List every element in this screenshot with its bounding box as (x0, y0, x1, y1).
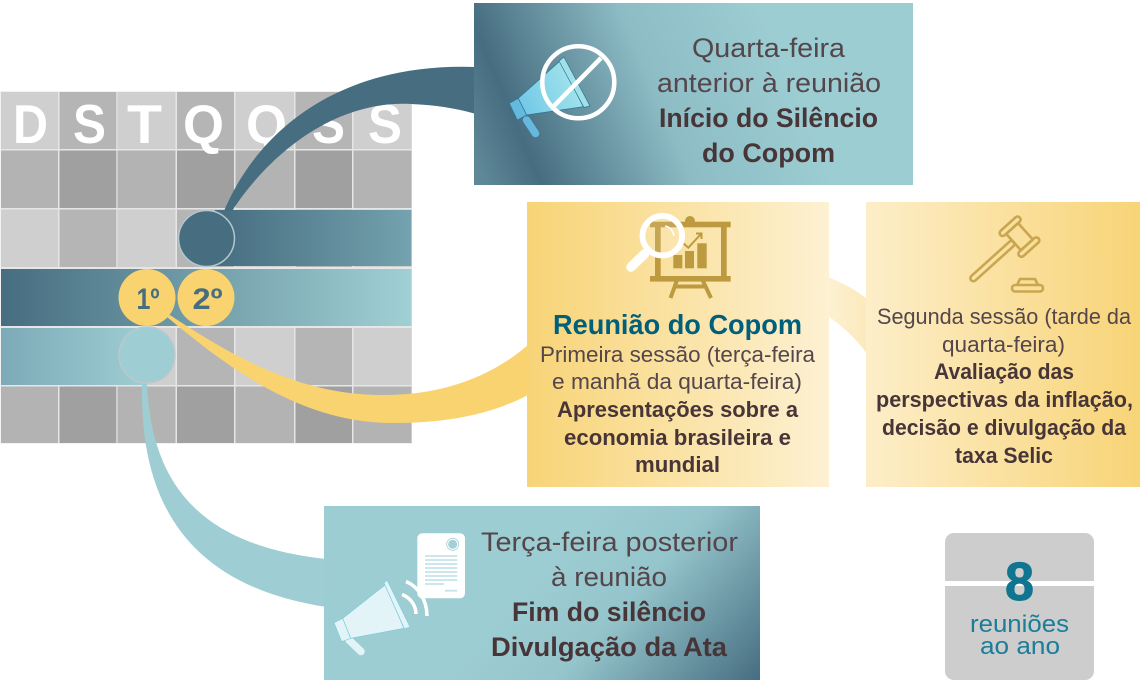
bar: following row (1, 328, 147, 385)
icon: megaphone (334, 580, 427, 652)
badge: 8 meetings a year (945, 533, 1094, 680)
circle: first session (118, 269, 176, 326)
circle: second-session day (178, 210, 234, 266)
icon: presentation board with magnifier (631, 216, 731, 298)
bar: week row to the second-session day (215, 210, 412, 266)
badge: 8 meetings a year: ao ano (980, 633, 1060, 660)
text: first session: e manhã da quarta-feira) (552, 369, 802, 394)
text: first session: mundial (635, 452, 720, 477)
heading: Reunião do Copom: Reunião do Copom (553, 309, 802, 340)
text: first session (540, 342, 816, 477)
panel: second session (866, 202, 1140, 487)
text: end of silence: Terça-feira posterior (481, 527, 738, 557)
circle: following tuesday (119, 327, 175, 383)
panel: start of silence (474, 3, 913, 185)
text: end of silence: Divulgação da Ata (491, 632, 728, 662)
circle: second session: 2º (192, 283, 223, 316)
text: end of silence (481, 527, 738, 662)
icon: gavel (960, 215, 1043, 293)
badge: 8 meetings a year: 8 (1005, 552, 1034, 612)
circle: second session (178, 269, 234, 326)
weekday letters: Q (246, 93, 287, 155)
badge: 8 meetings a year: reuniões (970, 611, 1069, 638)
text: start of silence: Quarta-feira (692, 33, 846, 63)
connector between sessions (828, 277, 867, 354)
text: end of silence: Fim do silêncio (512, 597, 706, 627)
weekday letters: D (13, 93, 48, 155)
text: second session: Avaliação das (934, 359, 1074, 384)
panel: first session (527, 202, 829, 487)
text: start of silence (657, 33, 881, 168)
text: second session: Segunda sessão (tarde da (877, 304, 1132, 329)
text: start of silence: anterior à reunião (657, 68, 881, 98)
text: start of silence: do Copom (702, 138, 835, 168)
circle: first session: 1º (136, 283, 160, 316)
weekday letters: S (73, 93, 106, 155)
panel: end of silence (324, 506, 760, 680)
icon: minutes document (417, 533, 465, 598)
arrow: yellow curve to meeting panel (167, 315, 528, 423)
bar: meeting row (1, 269, 412, 326)
text: first session: Apresentações sobre a (557, 397, 799, 422)
text: first session: economia brasileira e (564, 425, 791, 450)
weekday letters: S (368, 93, 402, 155)
text: second session: decisão e divulgação da (882, 415, 1127, 440)
icon: muted megaphone (509, 46, 614, 134)
arrow: dark curve to silence panel (224, 67, 476, 211)
text: start of silence: Início do Silêncio (659, 103, 878, 133)
text: second session (876, 304, 1133, 468)
arrow: light curve to minutes panel (142, 385, 326, 607)
weekday letters: Q (183, 93, 224, 155)
text: second session: quarta-feira) (942, 332, 1065, 357)
weekday letters: S (312, 93, 345, 155)
text: first session: Primeira sessão (terça-feira (540, 342, 816, 367)
text: second session: perspectivas da inflação, (876, 387, 1133, 412)
text: second session: taxa Selic (955, 443, 1053, 468)
text: end of silence: à reunião (551, 562, 667, 592)
weekday letters: T (127, 93, 162, 155)
calendar grid (0, 92, 412, 444)
weekday letters (13, 93, 402, 155)
